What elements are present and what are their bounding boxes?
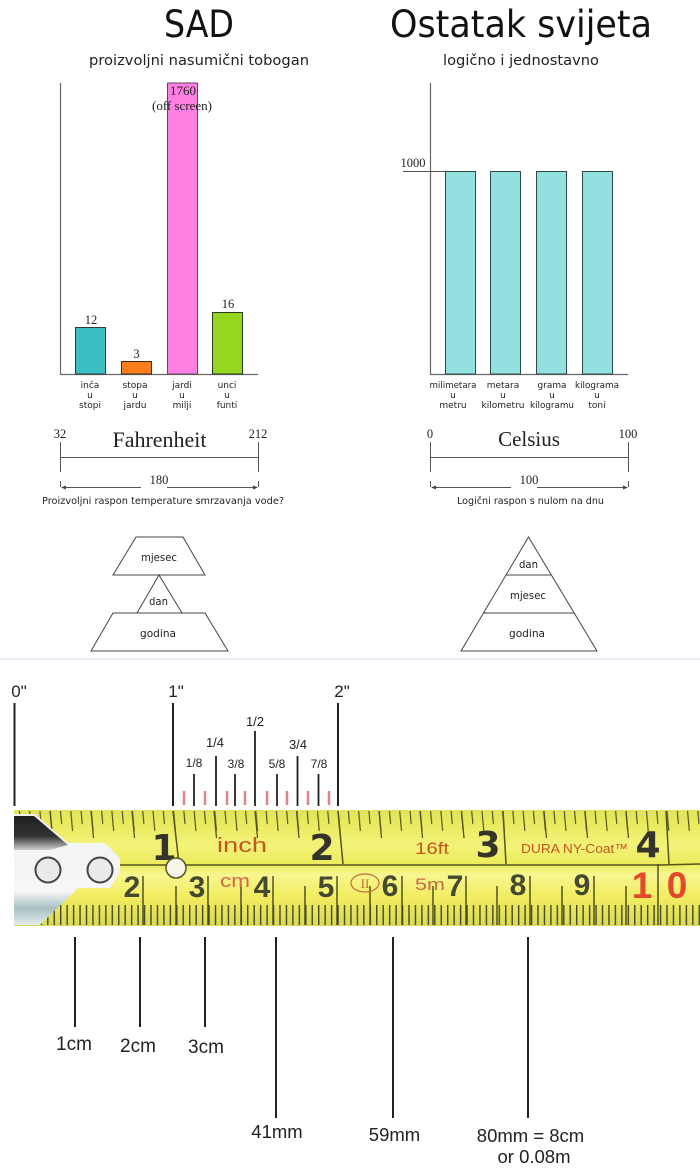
label: inch marks: 2" xyxy=(334,682,350,701)
axis labels: jardu xyxy=(123,401,146,411)
center line xyxy=(120,864,700,865)
centimetre numbers: 2 xyxy=(124,871,140,904)
axis labels xyxy=(79,380,237,411)
label: millimetres: 59mm xyxy=(369,1124,420,1145)
centimetre numbers: 3 xyxy=(189,871,205,904)
pyramid: metric date format: godina xyxy=(509,627,545,640)
label: fractions: 1/4 xyxy=(206,735,224,750)
axis labels: inča xyxy=(81,380,99,391)
axis labels: stopa xyxy=(123,381,147,391)
centimetre numbers: 4 xyxy=(254,871,271,904)
scale: Fahrenheit: Proizvoljni raspon temperature smrzavanja vode? xyxy=(42,496,284,507)
scale: Celsius: 100 xyxy=(520,473,538,487)
centimetre numbers xyxy=(124,869,590,904)
centimetre numbers: 7 xyxy=(447,870,463,903)
label: millimetres: or 0.08m xyxy=(497,1146,571,1167)
label: fractions: 1/8 xyxy=(186,756,203,770)
inch numbers: 1 xyxy=(151,828,177,869)
scale: Fahrenheit: 32 xyxy=(54,427,66,441)
scale: Celsius: 0 xyxy=(427,427,433,441)
label: centimetres xyxy=(56,1034,224,1058)
scale: Celsius: Celsius xyxy=(498,427,560,451)
centimetre numbers: 8 xyxy=(510,869,526,902)
pyramid: US date format: godina xyxy=(140,627,176,640)
II logo: II xyxy=(361,876,369,891)
pyramid: metric date format: mjesec xyxy=(510,589,546,602)
label: fractions: 1/2 xyxy=(246,714,264,729)
pyramid: US date format: dan xyxy=(149,595,168,608)
bar: inches in foot xyxy=(76,313,106,374)
upper inch ticks xyxy=(14,811,700,864)
axis labels xyxy=(430,381,619,411)
lower millimetre ticks xyxy=(40,864,700,925)
bar: inches in foot: 12 xyxy=(85,313,97,327)
axis labels: stopi xyxy=(79,401,101,411)
tape printed text: 16ft xyxy=(415,839,449,858)
axis labels: kilogramu xyxy=(530,401,574,411)
axis labels: u xyxy=(594,391,600,401)
scale: Celsius: 100 xyxy=(619,427,637,441)
axis labels: u xyxy=(500,391,506,401)
bar: yards in mile xyxy=(152,83,212,374)
pyramid: metric date format xyxy=(461,537,597,651)
axis labels: u xyxy=(549,391,555,401)
inch labels and marker lines xyxy=(11,682,350,806)
label: fractions xyxy=(186,714,328,771)
tape printed text: inch xyxy=(217,835,267,857)
axis labels: metara xyxy=(487,381,519,391)
scale: Fahrenheit: 180 xyxy=(150,473,168,487)
axis labels: u xyxy=(224,391,230,401)
bar: ounces in pound: 16 xyxy=(222,297,234,311)
axis labels: u xyxy=(450,391,456,401)
tape body xyxy=(14,810,700,926)
label: fractions: 7/8 xyxy=(311,757,328,771)
label: centimetres: 2cm xyxy=(120,1036,156,1057)
label: fractions: 3/4 xyxy=(289,737,307,752)
label: centimetres: 3cm xyxy=(188,1037,224,1058)
tape printed text: 5m xyxy=(415,875,445,894)
label: millimetres xyxy=(251,1121,584,1167)
label: fractions: 5/8 xyxy=(269,757,286,771)
bar chart: metric units xyxy=(400,83,628,411)
centimetre numbers: 6 xyxy=(382,870,398,903)
axis labels: u xyxy=(179,391,185,401)
inch numbers: 3 xyxy=(475,825,501,866)
axis labels: metru xyxy=(439,401,467,411)
tape printed text xyxy=(217,835,628,894)
title: Ostatak svijeta: Ostatak svijeta xyxy=(390,3,652,46)
axis labels: funti xyxy=(217,401,237,411)
inch numbers: 2 xyxy=(309,828,335,869)
metric marker lines and labels xyxy=(56,937,584,1167)
axis labels: jardi xyxy=(171,381,192,391)
bar: yards in mile: (off screen) xyxy=(152,98,212,113)
scale: Celsius: Logični raspon s nulom na dnu xyxy=(457,495,604,507)
axis labels: grama xyxy=(538,381,566,391)
axis labels: u xyxy=(87,391,93,401)
label: inch marks xyxy=(11,682,350,701)
axis labels: toni xyxy=(588,401,606,411)
scale: Celsius xyxy=(427,427,637,507)
red 10: 0 xyxy=(667,865,687,906)
red 10 xyxy=(632,865,687,906)
axis labels: kilograma xyxy=(575,381,619,391)
axis labels: u xyxy=(132,391,138,401)
bar: ounces in pound xyxy=(212,297,242,374)
label: millimetres: 80mm = 8cm xyxy=(477,1125,584,1146)
subtitle: SAD: proizvoljni nasumični tobogan xyxy=(89,53,309,69)
tape measure xyxy=(14,810,700,926)
label: inch marks: 0" xyxy=(11,682,27,701)
tape printed text: cm xyxy=(220,871,250,891)
tape printed text: DURA NY-Coat™ xyxy=(521,841,628,856)
inch numbers xyxy=(151,825,661,869)
pyramid: US date format xyxy=(91,537,228,651)
label: fractions: 3/8 xyxy=(228,757,245,771)
title: SAD: SAD xyxy=(164,3,234,46)
bar: feet in yard xyxy=(122,347,152,374)
subtitle: Ostatak svijeta: logično i jednostavno xyxy=(443,53,599,69)
pyramid: US date format: mjesec xyxy=(141,551,177,564)
bar chart: metric units: 1000 xyxy=(400,156,426,170)
centimetre numbers: 5 xyxy=(318,871,334,904)
axis labels: unci xyxy=(218,381,236,391)
bar: feet in yard: 3 xyxy=(133,347,140,361)
scale: Fahrenheit xyxy=(42,427,284,507)
bar: yards in mile: 1760 xyxy=(170,83,196,98)
label: centimetres: 1cm xyxy=(56,1034,92,1055)
scale: Fahrenheit: 212 xyxy=(249,427,267,441)
red 10: 1 xyxy=(632,865,652,906)
metal hook xyxy=(14,814,186,925)
label: inch marks: 1" xyxy=(168,682,184,701)
bar chart: US units xyxy=(60,83,258,411)
pyramid: metric date format: dan xyxy=(519,558,538,571)
centimetre numbers: 9 xyxy=(574,869,590,902)
scale: Fahrenheit: Fahrenheit xyxy=(112,427,207,452)
inch numbers: 4 xyxy=(635,825,661,866)
axis labels: milji xyxy=(173,401,191,411)
II logo xyxy=(351,874,379,892)
axis labels: kilometru xyxy=(482,401,524,411)
axis labels: milimetara xyxy=(430,381,476,391)
label: millimetres: 41mm xyxy=(251,1121,303,1142)
